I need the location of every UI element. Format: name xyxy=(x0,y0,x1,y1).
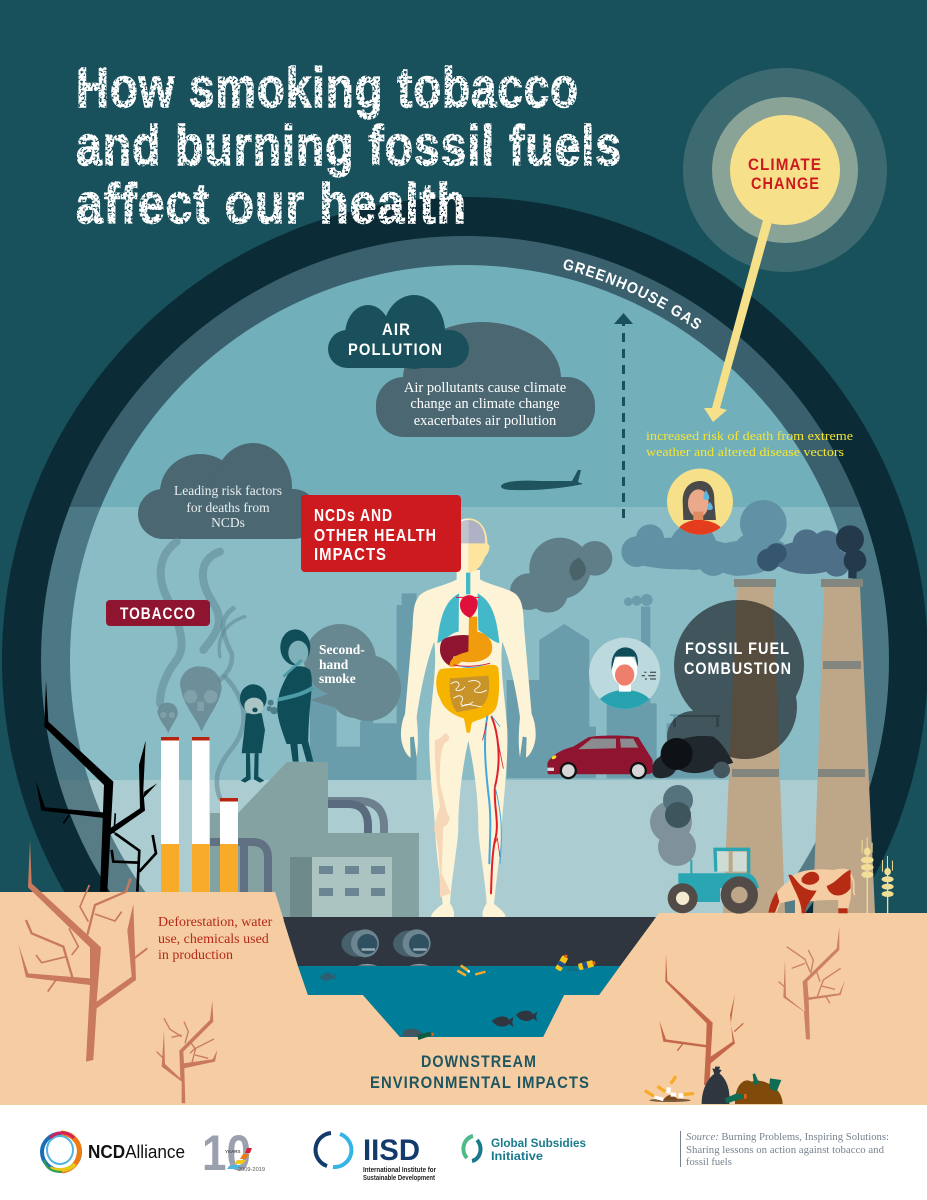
cloud: air pollutants explanation: change an climate change xyxy=(410,396,560,412)
dead tree bottom-right xyxy=(659,953,743,1085)
small intestine xyxy=(450,676,489,712)
leg bone xyxy=(434,733,451,897)
lungs and trachea xyxy=(437,573,499,643)
logo: IISD: IISD xyxy=(363,1134,420,1167)
figure: coughing child xyxy=(240,684,278,783)
label: NCDs and other health impacts: OTHER HEALTH xyxy=(314,525,437,545)
factory with pipes xyxy=(210,762,419,918)
tractor smoke xyxy=(650,785,696,866)
brain xyxy=(452,520,468,543)
bubble: fossil fuel combustion: COMBUSTION xyxy=(684,659,792,678)
footer xyxy=(0,1105,927,1200)
logo: 10 years: 2009-2019 xyxy=(238,1167,265,1173)
logo: IISD: Sustainable Development xyxy=(363,1175,436,1182)
background factories left xyxy=(310,593,417,780)
cloud: air pollution heading xyxy=(328,295,469,369)
drain pipes, fish and litter in water xyxy=(320,929,596,1040)
tractor xyxy=(668,849,759,914)
cloud: leading risk factors: NCDs xyxy=(211,515,245,530)
cloud: air pollutants explanation xyxy=(376,322,595,437)
cloud: leading risk factors: for deaths from xyxy=(186,500,270,515)
cloud: second-hand smoke xyxy=(304,624,401,721)
logo: Global Subsidies Initiative: Initiative xyxy=(491,1151,543,1163)
small dead tree bottom-left xyxy=(157,1001,217,1103)
car xyxy=(547,736,653,779)
body silhouette xyxy=(401,518,536,919)
heart xyxy=(456,595,479,618)
title: affect our health xyxy=(76,172,467,236)
polluted water xyxy=(298,966,620,1037)
text: deforestation: in production xyxy=(158,948,233,963)
dashed arrow: greenhouse gas rising xyxy=(614,313,633,518)
arrow: climate change to health risk xyxy=(704,220,772,422)
cloud: second-hand smoke: hand xyxy=(319,657,349,672)
logo: IISD xyxy=(316,1133,436,1182)
cloud: air pollutants explanation: Air pollutants cause climate xyxy=(404,380,566,396)
logo: Global Subsidies Initiative xyxy=(463,1136,586,1163)
wheat stalks xyxy=(861,837,894,914)
label: tobacco xyxy=(106,600,210,626)
title: How smoking tobacco xyxy=(76,56,579,120)
cloud: leading risk factors: Leading risk factors xyxy=(174,483,282,498)
text: deforestation: Deforestation, water xyxy=(158,915,273,930)
power station chimneys xyxy=(723,579,875,913)
black dead tree xyxy=(36,680,157,892)
logo: NCD Alliance xyxy=(42,1133,185,1172)
label: NCDs and other health impacts xyxy=(301,495,461,572)
cow xyxy=(768,869,855,913)
polluted mud bank xyxy=(283,917,656,966)
veins and arteries xyxy=(483,716,503,893)
logo: NCD Alliance: NCDAlliance xyxy=(88,1142,185,1162)
source note: Source: Burning Problems, Inspiring Solutions: xyxy=(686,1132,889,1143)
curved label: greenhouse gas: GREENHOUSE GAS xyxy=(564,260,702,329)
logo: 10 years: 10 xyxy=(202,1125,251,1181)
large dead tree left xyxy=(18,840,147,1062)
cloud: second-hand smoke: smoke xyxy=(319,671,356,686)
power plant smoke xyxy=(621,500,866,578)
sun: climate change: CHANGE xyxy=(751,174,820,193)
dead tree right xyxy=(779,927,845,1039)
litter pile: cigarette butts xyxy=(644,1075,694,1102)
litter pile: rubbish bag and bottles xyxy=(702,1067,783,1104)
heading: downstream environmental impacts: DOWNSTREAM xyxy=(421,1052,537,1071)
heading: downstream environmental impacts xyxy=(370,1052,590,1092)
bubble: fossil fuel combustion: FOSSIL FUEL xyxy=(685,639,790,658)
sun: climate change: CLIMATE xyxy=(748,155,822,174)
cigarettes xyxy=(161,737,238,893)
logo: 10 years: YEARS xyxy=(225,1149,241,1154)
large intestine xyxy=(436,665,499,733)
car exhaust smoke xyxy=(652,736,733,778)
cloud: leading risk factors xyxy=(138,443,318,539)
text: increased risk of death: increased risk of death from extreme xyxy=(646,428,853,443)
human body xyxy=(401,518,536,919)
cloud: air pollutants explanation: exacerbates air pollution xyxy=(414,413,557,429)
title xyxy=(76,56,622,236)
figure: pregnant woman xyxy=(277,629,313,762)
blood near stomach xyxy=(453,663,490,666)
source note xyxy=(680,1131,889,1168)
atmosphere dome xyxy=(0,197,927,1123)
logo: Global Subsidies Initiative: Global Subsidies xyxy=(491,1138,586,1150)
bubble: fossil fuel combustion xyxy=(667,600,804,759)
airplane xyxy=(501,470,583,490)
cloud: air pollution heading: AIR xyxy=(382,321,411,339)
source note: Sharing lessons on action against tobacco and xyxy=(686,1145,885,1156)
logo: IISD: International Institute for xyxy=(363,1167,436,1174)
smoke cloud behind body xyxy=(510,538,612,613)
title: and burning fossil fuels xyxy=(76,114,622,178)
stomach xyxy=(449,617,492,667)
liver xyxy=(440,635,472,667)
text: deforestation: use, chemicals used xyxy=(158,932,269,947)
sun: climate change xyxy=(683,68,887,272)
cloud: second-hand smoke: Second- xyxy=(319,642,365,657)
label: NCDs and other health impacts: NCDs AND xyxy=(314,505,393,525)
text: increased risk of death: weather and altered disease vectors xyxy=(646,444,844,459)
text: deforestation xyxy=(158,915,273,963)
label: tobacco: TOBACCO xyxy=(120,605,196,623)
label: NCDs and other health impacts: IMPACTS xyxy=(314,544,387,564)
cigarette smoke and skulls xyxy=(157,542,245,798)
ground xyxy=(0,892,927,1105)
icon: man wearing mask xyxy=(589,638,660,710)
cloud: air pollution heading: POLLUTION xyxy=(348,341,443,359)
source note: fossil fuels xyxy=(686,1157,732,1168)
heading: downstream environmental impacts: ENVIRONMENTAL IMPACTS xyxy=(370,1073,590,1092)
text: increased risk of death xyxy=(646,428,853,459)
background factories right xyxy=(507,594,723,778)
icon: woman crying xyxy=(667,469,733,537)
